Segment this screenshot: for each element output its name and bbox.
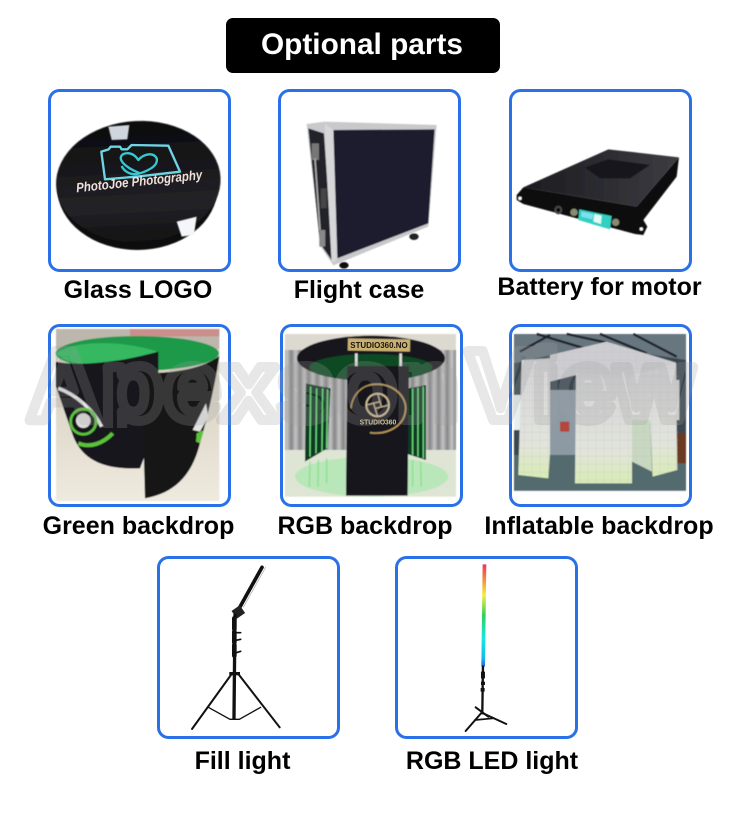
panel: RGB backdrop: [277, 326, 462, 540]
image: RGB backdrop: STUDIO360: [360, 417, 396, 426]
label: Flight case: [294, 276, 424, 304]
panel: RGB LED light: [396, 558, 579, 775]
image: glass logo turntable: PhotoJoe Photography: [75, 167, 203, 195]
label: Glass LOGO: [64, 276, 212, 304]
label: Inflatable backdrop: [484, 512, 714, 540]
image: RGB backdrop: STUDIO360.NO: [350, 340, 408, 350]
panel: glass logo: [50, 90, 230, 304]
label: RGB backdrop: [277, 512, 453, 540]
image: glass logo turntable: [53, 117, 224, 250]
image: RGB LED tube on stand: [466, 564, 506, 731]
panel: flight case: [280, 90, 460, 304]
watermark: View: [467, 330, 693, 442]
panel: green backdrop: [43, 326, 234, 540]
panel: fill light: [158, 558, 338, 775]
image: RGB backdrop: [285, 334, 456, 497]
image: green backdrop: [56, 329, 219, 501]
image: fill light on tripod: [192, 567, 280, 729]
label: Green backdrop: [43, 512, 234, 540]
panel: battery: [497, 90, 702, 301]
watermark: Apexson: [27, 330, 459, 442]
image: inflatable backdrop: [514, 334, 686, 491]
label: RGB LED light: [406, 747, 579, 775]
title: [226, 18, 500, 73]
watermark: [24, 342, 698, 428]
label: Fill light: [195, 747, 291, 775]
label: Battery for motor: [497, 273, 702, 301]
panel: inflatable backdrop: [484, 326, 714, 540]
image: flight case: [307, 122, 437, 269]
title: Optional parts: [261, 28, 463, 61]
image: battery box: [517, 149, 679, 235]
